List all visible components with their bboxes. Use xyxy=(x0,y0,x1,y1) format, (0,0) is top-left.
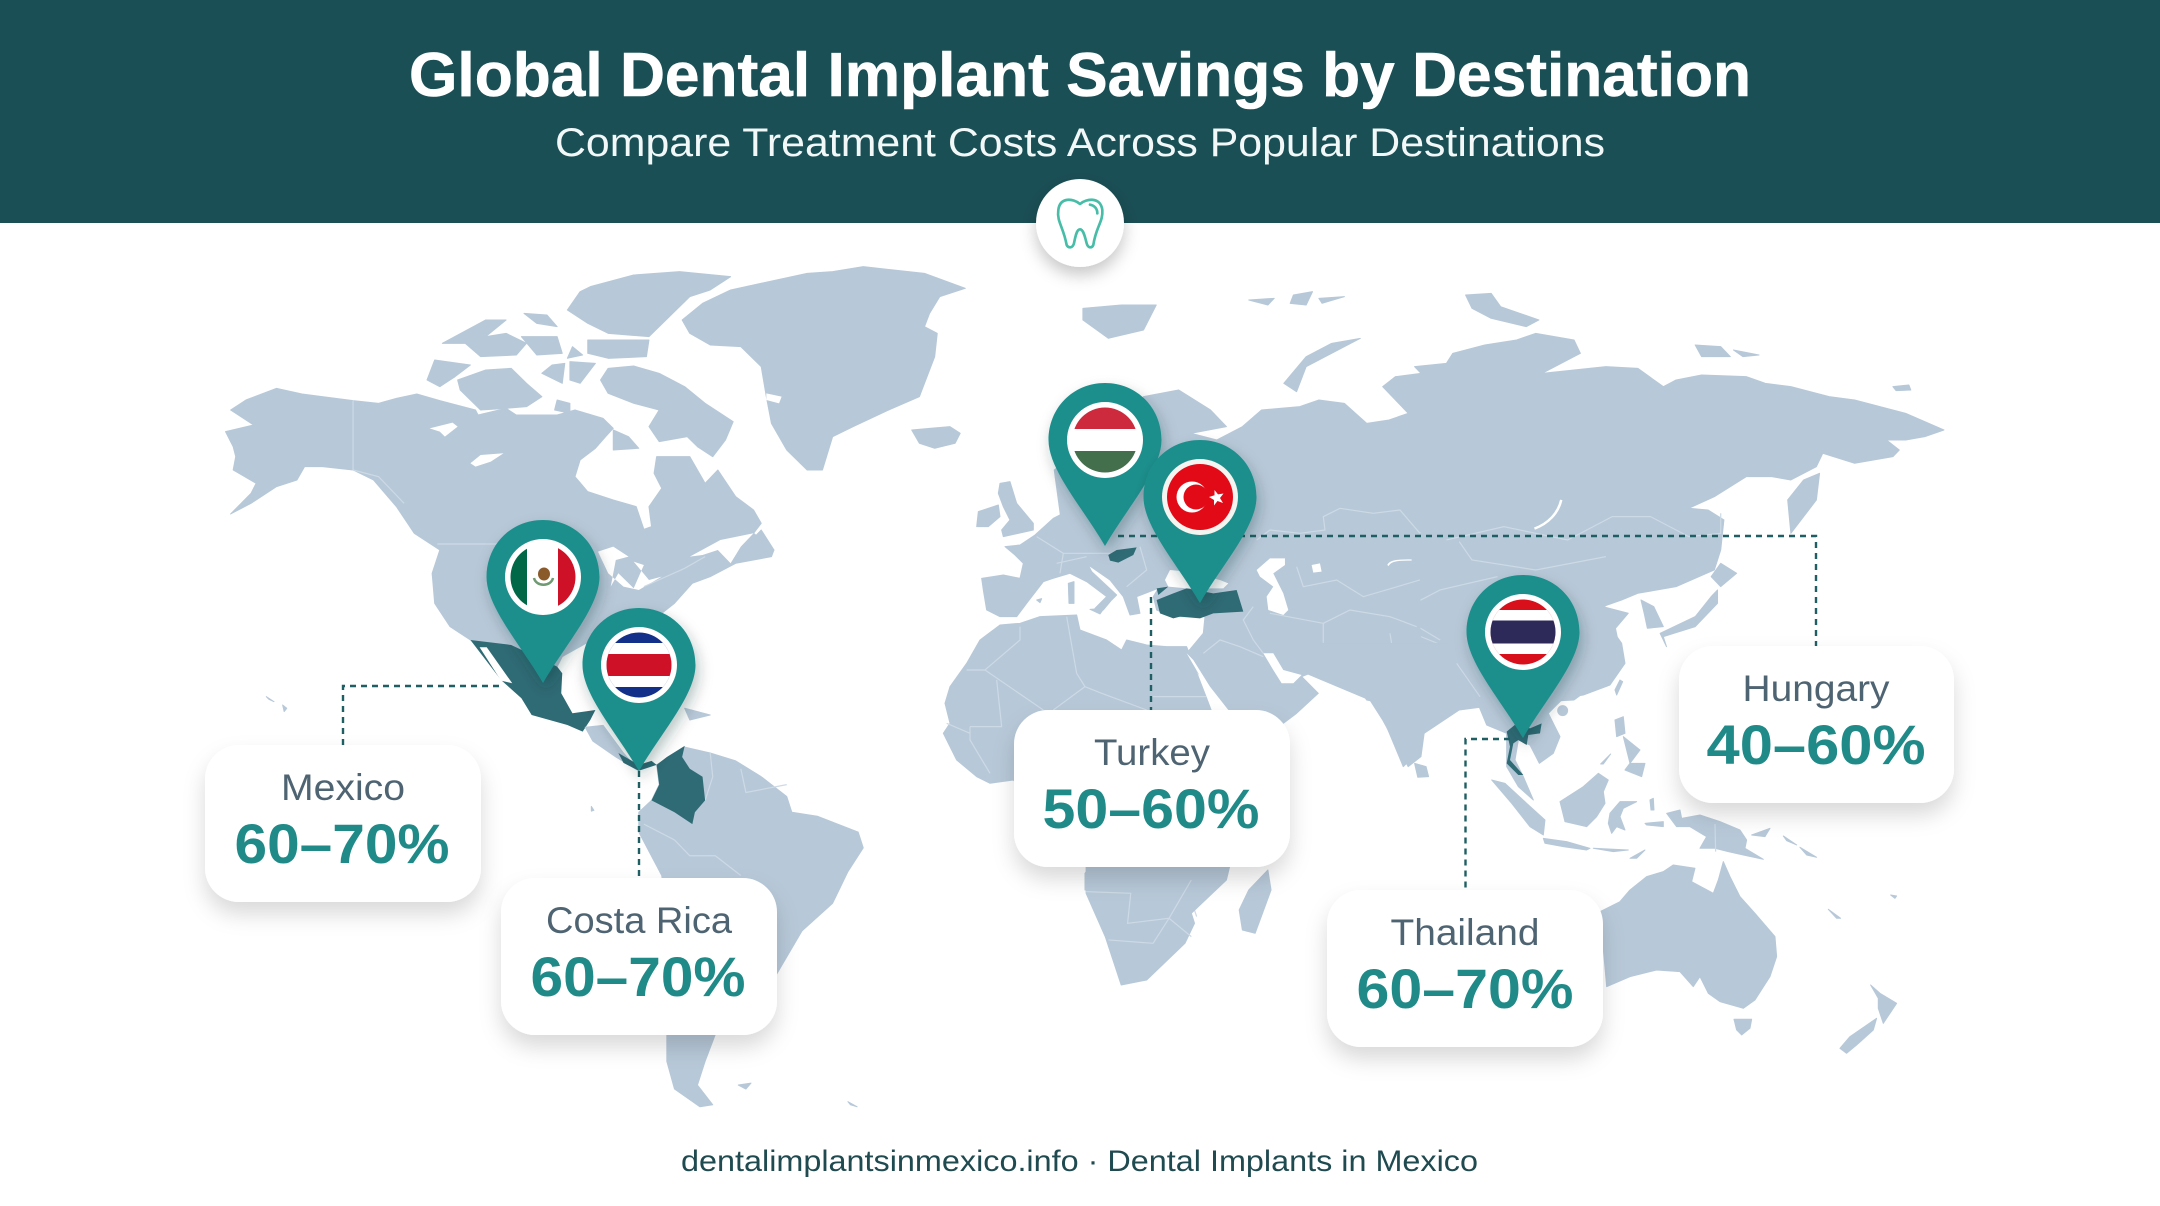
icon: tooth badge xyxy=(1036,179,1124,267)
card: Hungary: 40–60% xyxy=(1706,713,1926,776)
card: Mexico: 60–70% xyxy=(234,812,450,875)
header band xyxy=(0,0,2160,223)
map: Southeast Asia and Oceania xyxy=(1450,600,1897,1053)
pin: Costa Rica xyxy=(582,608,696,771)
flag: Hungary xyxy=(1072,407,1138,473)
pin: Thailand xyxy=(1466,575,1580,738)
map: Thailand highlighted xyxy=(1507,723,1542,775)
map: Central and South America xyxy=(585,725,863,1107)
card: Thailand: 60–70% xyxy=(1356,957,1574,1020)
flag: Costa Rica xyxy=(606,632,672,698)
map: southern Africa and India xyxy=(1086,643,1523,985)
card: Mexico: Mexico xyxy=(281,767,405,808)
world map xyxy=(226,267,1944,1107)
card: Costa Rica: 60–70% xyxy=(530,945,746,1008)
map: Northern Asia and Arctic islands xyxy=(1054,292,1944,707)
card: Mexico xyxy=(205,745,481,902)
subtitle: Compare Treatment Costs Across Popular Destinations xyxy=(555,121,1605,165)
card: Turkey: 50–60% xyxy=(1042,777,1260,840)
pin: Hungary xyxy=(1048,383,1162,546)
card: Costa Rica: Costa Rica xyxy=(546,900,732,941)
pin: Mexico xyxy=(486,520,600,683)
map: Mexico highlighted xyxy=(470,640,595,732)
map: Hungary and Turkey highlighted xyxy=(1108,547,1243,618)
pin: Turkey xyxy=(1144,440,1256,603)
card: Hungary: Hungary xyxy=(1742,668,1890,709)
map: North America and Greenland xyxy=(226,267,965,720)
card: Turkey: Turkey xyxy=(1094,732,1211,773)
flag: Turkey xyxy=(1167,464,1233,530)
footer source line: dentalimplantsinmexico.info · Dental Implants in Mexico xyxy=(681,1145,1478,1178)
card: Costa Rica xyxy=(501,878,777,1035)
leader lines xyxy=(343,536,1816,890)
map: Europe, Middle East and South Asia xyxy=(943,440,1420,940)
card: Hungary xyxy=(1679,646,1954,803)
flag: Mexico xyxy=(510,548,576,606)
card: Thailand xyxy=(1327,890,1603,1047)
card: Turkey xyxy=(1014,710,1290,867)
map: Colombia and Panama highlighted xyxy=(618,746,705,824)
title: Global Dental Implant Savings by Destination xyxy=(409,41,1751,110)
map: inland seas xyxy=(1165,558,1412,710)
card: Thailand: Thailand xyxy=(1390,912,1540,953)
flag: Thailand xyxy=(1490,599,1556,665)
